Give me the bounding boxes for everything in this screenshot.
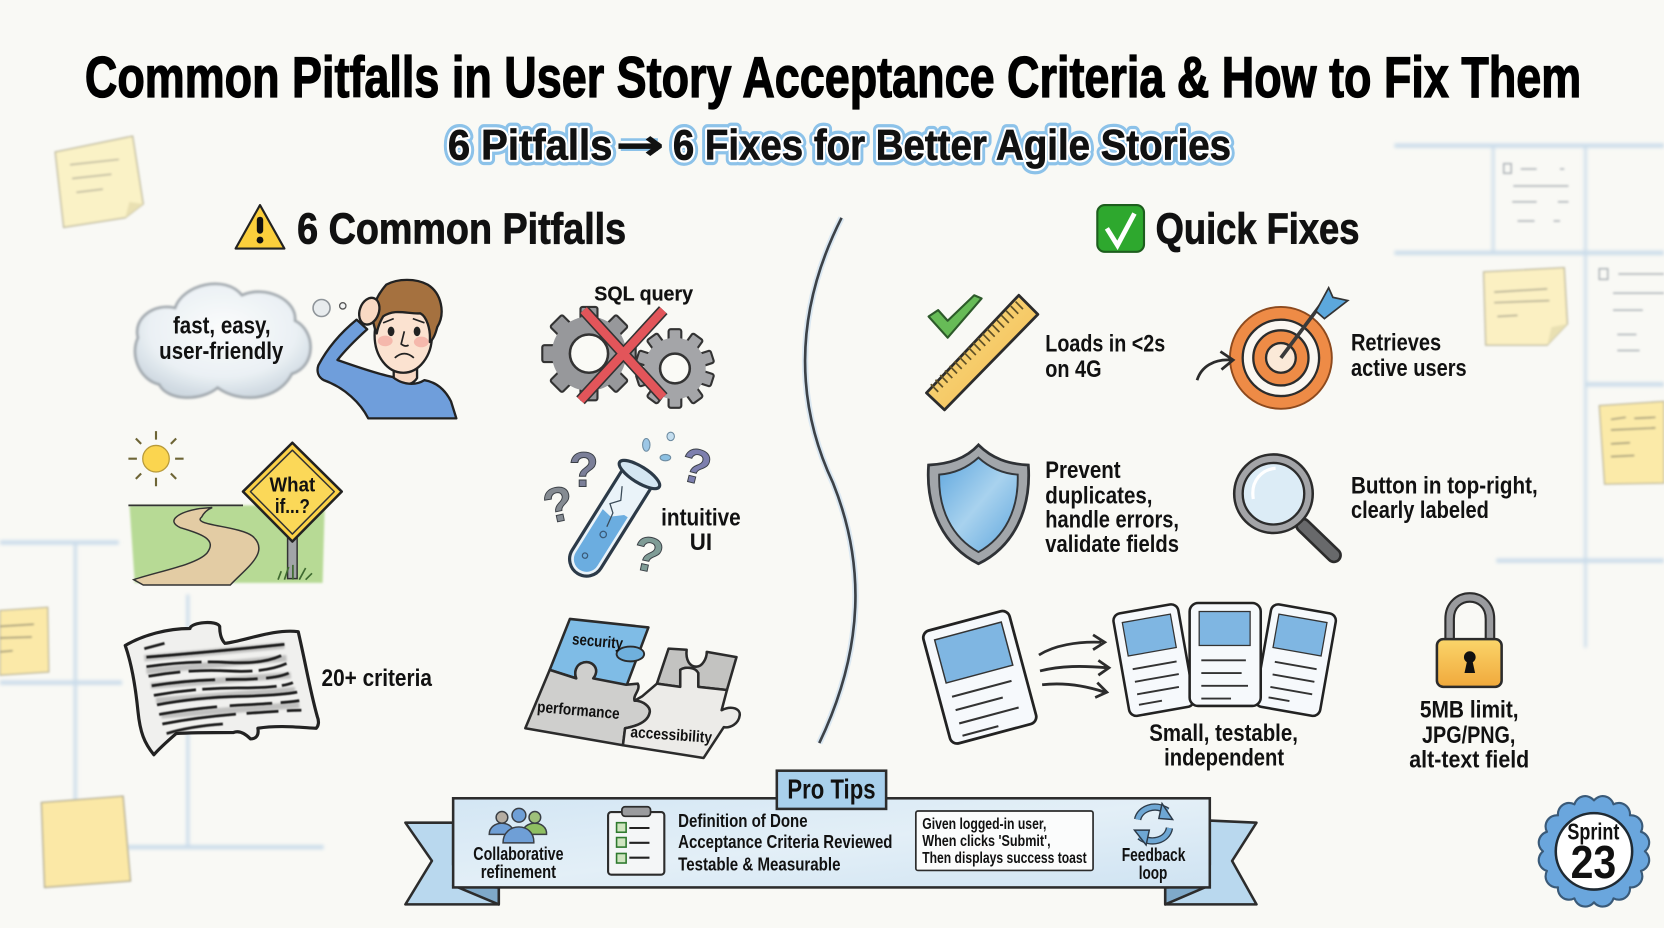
pitfall: crumpled long document [125,623,432,755]
pitfall: broken test tube, intuitive UI: ? [628,526,668,585]
tip: given when then box [916,811,1093,870]
panel: quick fixes [922,288,1538,774]
banner ribbon tails [405,821,1256,904]
banner: pro tips [405,771,1256,904]
fix: security shield: handle errors, [1045,507,1179,534]
center curved divider [805,218,855,743]
tip: definition of done clipboard: Acceptance Criteria Reviewed [678,832,892,852]
subtitle: → [616,121,664,170]
tip: given when then box: Then displays success toast [922,850,1087,867]
fix: padlock with upload limits [1409,597,1529,774]
pitfall: broken test tube, intuitive UI: ? [569,443,599,497]
pro tips tab [777,771,886,809]
fix: split story into small cards: independent [1164,744,1284,771]
fix: magnifying glass: clearly labeled [1351,497,1489,524]
tip: feedback loop: loop [1139,863,1167,883]
tip: collaborative refinement [473,808,564,882]
pitfall: vague terms cloud: fast, easy, [173,312,271,339]
pitfall: broken test tube, intuitive UI: ? [538,476,579,535]
fix: split story into small cards: Small, testable, [1149,720,1298,747]
sticky note bottom left [41,796,131,887]
heading: quick fixes: Quick Fixes [1156,205,1359,253]
sticky note right upper [1484,268,1567,345]
tip: collaborative refinement: refinement [481,862,556,882]
pitfall: path with what-if road sign: What [270,475,315,497]
pitfall: puzzle of non-functional requirements: security [571,631,624,653]
panel: pitfalls [125,280,741,758]
tip: given when then box: When clicks 'Submit', [922,833,1051,850]
tip: feedback loop [1122,804,1186,883]
fix: security shield: duplicates, [1045,482,1152,509]
subtitle [448,121,1231,170]
fix: target with arrow: active users [1351,355,1467,382]
pitfall: vague terms cloud [135,284,346,398]
fix: split story into small cards [922,603,1337,771]
tip: definition of done clipboard [608,807,892,875]
tip: definition of done clipboard: Definition of Done [678,811,808,831]
pitfall: crumpled long document: 20+ criteria [322,665,432,692]
tip: collaborative refinement: Collaborative [473,844,564,864]
pitfall: path with what-if road sign: if...? [275,496,310,518]
cards: three small stories [1112,603,1337,717]
sticky note left middle [0,607,49,675]
pitfall: broken test tube, intuitive UI: intuitive [661,505,741,532]
pitfall: SQL query gears crossed out: SQL query [594,284,694,306]
pitfall: path with what-if road sign [128,431,342,585]
tip: given when then box: Given logged-in user, [922,816,1046,833]
pitfall: broken test tube, intuitive UI: UI [690,529,712,556]
tip: feedback loop: Feedback [1122,845,1186,865]
sprint 23 badge: Sprint [1567,819,1620,845]
pitfall: puzzle of non-functional requirements: performance [536,699,620,723]
fix: measurable ruler: Loads in <2s [1045,331,1165,358]
fix: padlock with upload limits: 5MB limit, [1420,697,1519,724]
subtitle: 6 Fixes for Better Agile Stories [673,121,1231,168]
fix: padlock with upload limits: alt-text field [1409,747,1529,774]
fix: measurable ruler [926,295,1165,410]
fix: magnifying glass [1234,454,1538,555]
pitfall: SQL query gears crossed out [542,284,714,408]
pitfall: puzzle of non-functional requirements [525,619,740,758]
fix: target with arrow [1197,288,1467,409]
banner body [453,798,1210,887]
card: large story [922,609,1038,745]
fix: magnifying glass: Button in top-right, [1351,473,1538,500]
pitfall: broken test tube, intuitive UI [538,432,741,586]
subtitle: 6 Pitfalls [448,121,612,168]
heading: 6 common pitfalls: 6 Common Pitfalls [297,205,626,253]
pitfall: broken test tube, intuitive UI: ? [675,437,717,497]
pro tips tab: Pro Tips [787,773,876,804]
sprint 23 badge: 23 [1571,836,1616,888]
tip: definition of done clipboard: Testable & Measurable [678,854,840,874]
sprint 23 badge [1539,796,1649,907]
fix: security shield: Prevent [1045,457,1121,484]
arrows: split into three [1039,635,1109,697]
fix: security shield: validate fields [1045,531,1179,558]
subtitle: 6 Pitfalls [448,121,612,168]
fix: security shield [928,445,1179,564]
fix: measurable ruler: on 4G [1045,356,1102,383]
subtitle: 6 Fixes for Better Agile Stories [673,121,1231,168]
subtitle: 6 Pitfalls [448,121,612,168]
heading: quick fixes [1097,205,1359,253]
sticky note right lower [1599,401,1664,484]
pitfall: puzzle of non-functional requirements: accessibility [630,724,713,747]
icon: confused person [318,280,456,418]
pitfall: vague terms cloud: user-friendly [159,338,284,365]
subtitle: 6 Fixes for Better Agile Stories [673,121,1231,168]
fix: target with arrow: Retrieves [1351,329,1441,356]
timeline line to sprint badge [1335,852,1526,855]
fix: padlock with upload limits: JPG/PNG, [1422,722,1515,749]
sticky note top left [55,136,143,227]
